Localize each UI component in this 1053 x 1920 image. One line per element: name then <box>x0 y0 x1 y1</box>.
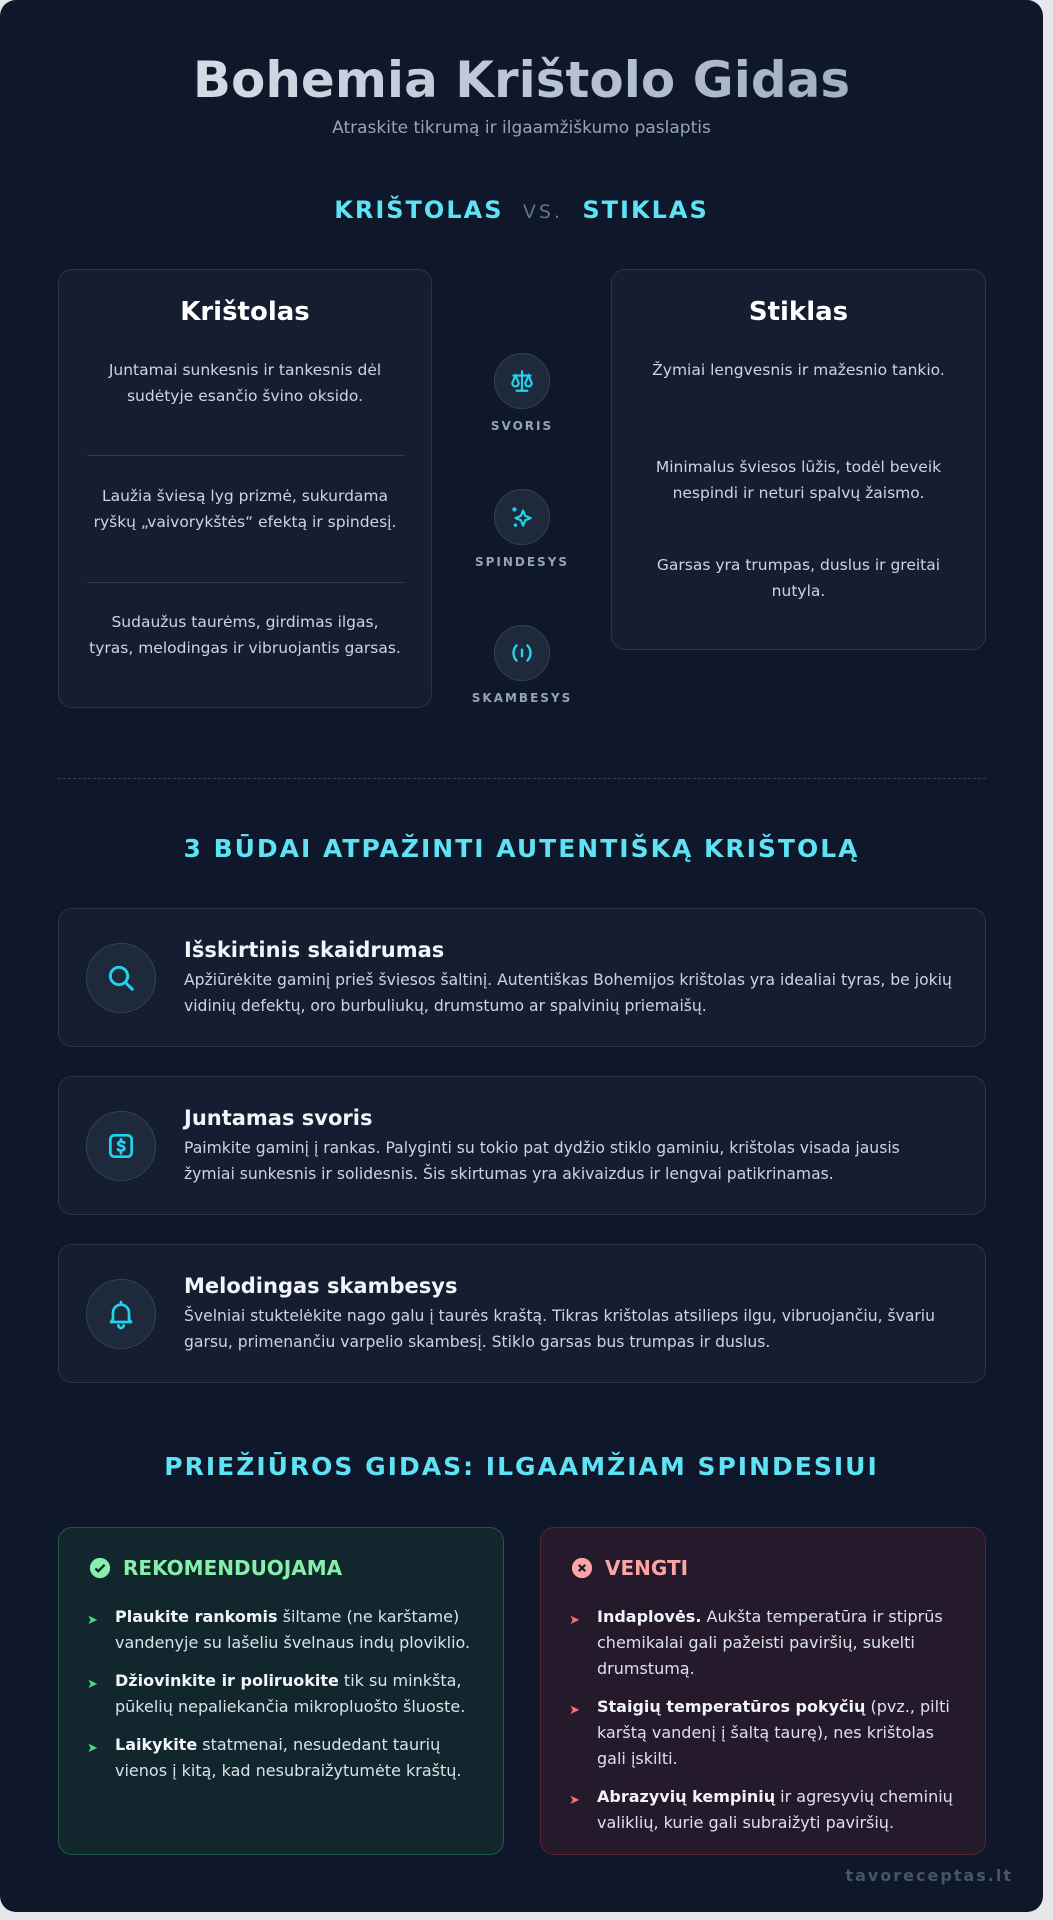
list avoid <box>570 1607 953 1832</box>
card: weight: Paimkite gaminį į rankas. Palyginti su tokio pat dydžio stiklo gaminiu, krištolas visada jausis žymiai sunkesnis ir solidesnis. Šis skirtumas yra akivaizdus ir lengvai patikrinamas. <box>184 1139 900 1183</box>
panel: stiklas <box>611 269 986 650</box>
card: sound <box>58 1244 986 1383</box>
section heading: care: PRIEŽIŪROS GIDAS: ILGAAMŽIAM SPINDESIUI <box>164 1452 879 1481</box>
list recommended: Džiovinkite ir poliruokite tik su minkšta, pūkelių nepaliekančia mikropluošto šluoste. <box>115 1671 465 1716</box>
icon: bell <box>86 1279 156 1349</box>
text sound <box>89 613 401 657</box>
list recommended: Plaukite rankomis šiltame (ne karštame) vandenyje su lašeliu švelnaus indų ploviklio. <box>115 1607 470 1652</box>
list avoid: Staigių temperatūros pokyčių (pvz., pilti karštą vandenį į šaltą taurę), nes krištolas gali įskilti. <box>597 1697 950 1768</box>
list avoid: Abrazyvių kempinių ir agresyvių cheminių valiklių, kurie gali subraižyti paviršių. <box>597 1787 953 1832</box>
card: clarity: Išskirtinis skaidrumas <box>184 938 444 962</box>
icon: sparkle: SPINDESYS <box>475 555 569 569</box>
vs heading: KRIŠTOLAS VS. STIKLAS <box>334 196 709 224</box>
heading recommended: REKOMENDUOJAMA <box>123 1556 342 1580</box>
title <box>0 51 1043 109</box>
footer brand: tavoreceptas.lt <box>845 1866 1013 1885</box>
icon: weight <box>86 1111 156 1181</box>
text sound: Sudaužus taurėms, girdimas ilgas, <box>111 613 379 631</box>
list recommended: Laikykite statmenai, nesudedant taurių vienos į kitą, kad nesubraižytumėte kraštų. <box>115 1735 461 1780</box>
text sound: Garsas yra trumpas, duslus ir greitai nutyla. <box>657 556 940 600</box>
icon: sparkle <box>475 489 569 569</box>
subtitle: Atraskite tikrumą ir ilgaamžiškumo paslaptis <box>332 118 711 138</box>
text sound: tyras, melodingas ir vibruojantis garsas. <box>89 639 401 657</box>
text sparkle: Laužia šviesą lyg prizmė, sukurdama ryškų „vaivorykštės“ efektą ir spindesį. <box>94 487 396 531</box>
icon: sound: SKAMBESYS <box>472 691 572 705</box>
title: Bohemia Krištolo Gidas <box>193 51 850 109</box>
card: weight: Juntamas svoris <box>184 1106 372 1130</box>
heading stiklas: Stiklas <box>749 297 848 327</box>
card: clarity: Apžiūrėkite gaminį prieš šviesos šaltinį. Autentiškas Bohemijos krištolas yra idealiai tyras, be jokių vidinių defektų, oro burbuliukų, drumstumo ar spalvinių priemaišų. <box>184 971 952 1015</box>
icon: scale <box>491 353 553 433</box>
icon: sound <box>472 625 572 705</box>
heading kristolas: Krištolas <box>180 297 310 327</box>
card: sound: Švelniai stuktelėkite nago galu į taurės kraštą. Tikras krištolas atsilieps ilgu, vibruojančiu, švariu garsu, primenančiu varpelio skambesį. Stiklo garsas bus trumpas ir duslus. <box>184 1307 935 1351</box>
text weight: Žymiai lengvesnis ir mažesnio tankio. <box>652 361 945 379</box>
text sparkle: Minimalus šviesos lūžis, todėl beveik nespindi ir neturi spalvų žaismo. <box>656 458 941 502</box>
card: clarity <box>58 908 986 1047</box>
text weight: Juntamai sunkesnis ir tankesnis dėl sudėtyje esančio švino oksido. <box>109 361 381 405</box>
icon: magnifier <box>86 943 156 1013</box>
panel: kristolas <box>58 269 432 708</box>
panel: recommended <box>58 1527 504 1855</box>
panel: avoid <box>540 1527 986 1855</box>
heading avoid: VENGTI <box>605 1556 688 1580</box>
list recommended <box>88 1607 470 1780</box>
section heading: 3 ways: 3 BŪDAI ATPAŽINTI AUTENTIŠKĄ KRIŠTOLĄ <box>183 834 860 863</box>
card: sound: Melodingas skambesys <box>184 1274 457 1298</box>
icon: scale: SVORIS <box>491 419 553 433</box>
list avoid: Indaplovės. Aukšta temperatūra ir stiprūs chemikalai gali pažeisti paviršių, sukelti drumstumą. <box>597 1607 943 1678</box>
card: weight <box>58 1076 986 1215</box>
